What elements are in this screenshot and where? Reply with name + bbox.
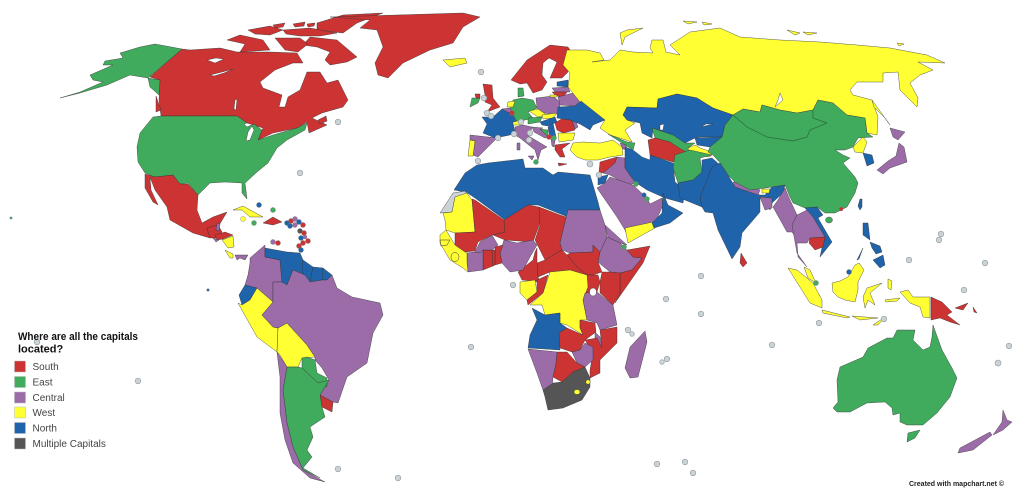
Central Europe [528,96,560,138]
North Africa [454,159,600,220]
Levant and Iraq [598,157,635,185]
legend title: located? [18,344,64,356]
Russian islands [620,21,904,125]
Baltics and Belarus [550,80,581,106]
Nordics [511,45,570,93]
legend title: Where are all the capitals [18,331,138,343]
Aral Sea and Balkhash [660,124,713,130]
Lake Victoria [590,288,596,296]
Mongolia border [733,110,827,141]
legend item: North: North [32,424,57,434]
credit: Created with mapchart.net © [909,480,1005,488]
Iceland [443,58,467,67]
caribbean capital markers [240,202,310,252]
Brazil [262,270,383,403]
Caucasus [608,134,635,150]
Turkmenistan [648,138,687,162]
Colombia [245,245,282,302]
russia [563,21,945,142]
Koreas [853,137,874,166]
island territory markers [34,69,1012,481]
legend item: West: West [32,408,55,419]
Lake Michigan [246,126,254,141]
Argentina [283,367,329,478]
Chile [277,352,325,482]
Benelux Switzerland [502,101,523,125]
Mauritania [443,193,475,233]
Niger [493,205,540,242]
Kenya [600,272,620,305]
India [700,163,785,259]
legend title [18,331,138,356]
Australia [833,325,957,425]
South Africa [543,367,590,410]
Botswana [553,352,585,382]
Taiwan [858,199,862,210]
South Sudan [567,245,602,275]
Turkey [570,140,623,160]
Tajikistan [688,145,712,157]
Alaska and USA [60,44,307,199]
Indonesia and Malaysia [788,263,930,325]
Southeast Asia [773,188,832,283]
Uganda [585,275,600,293]
New Zealand [958,410,1012,453]
Central America [207,206,282,260]
south america [238,245,383,482]
africa [440,159,650,410]
France [482,109,519,138]
legend item: Multiple Capitals: Multiple Capitals [32,439,106,450]
Mali [455,199,505,252]
Uzbekistan [652,128,695,153]
oceania [833,325,1012,453]
Sudan [560,210,607,253]
Russia mainland [563,28,945,142]
Ethiopia [598,237,642,273]
Uruguay [320,395,333,412]
Tasmania [907,430,920,442]
Mexico [145,174,227,238]
Chad [535,207,566,260]
Sri Lanka [740,253,747,267]
Malawi [595,332,602,347]
Italy [515,125,547,160]
Arabian Peninsula [597,177,683,243]
Afghanistan [673,150,712,183]
Philippines [857,223,885,268]
small-state capital markers [10,110,852,291]
Somalia [615,246,650,303]
Greenland [330,13,480,78]
Lake Baikal [775,93,783,107]
Eritrea [605,225,627,245]
Zambia [559,320,596,352]
Kyrgyzstan [695,137,722,147]
legend item: East: East [32,378,53,388]
Angola [528,308,567,350]
legend item: South: South [32,362,59,373]
legend item: Central: Central [32,393,65,404]
Canada [150,13,383,140]
Iberia [468,135,497,157]
Kazakhstan [623,94,733,143]
DR Congo [530,270,588,335]
Nepal Bhutan Bangladesh [733,182,772,210]
Japan [877,128,907,174]
West African coast [440,230,503,272]
Tanzania [583,292,617,330]
Central African Republic [537,250,587,277]
Lesotho and Eswatini [574,380,590,394]
Germany and Denmark [510,88,537,122]
Paraguay [302,357,327,387]
UK and Ireland [470,84,500,112]
Mozambique [585,327,617,378]
China and Mongolia [708,100,873,213]
europe [468,45,605,166]
Cameroon [518,248,540,282]
Peru and Bolivia [238,288,315,367]
Nigeria [500,240,537,272]
north america [60,13,480,260]
Western Sahara [440,191,467,213]
Iran [625,147,685,203]
Namibia [528,349,557,390]
Ukraine [557,101,605,130]
Zimbabwe [572,343,593,367]
Congo region [520,275,548,305]
legend [14,331,138,450]
Venezuela and Guianas [239,248,332,305]
Canadian lakes [207,58,237,110]
Balkans [548,118,578,166]
Papua New Guinea [931,297,977,325]
asia [570,94,977,325]
Madagascar [625,331,647,378]
Pakistan [678,158,720,207]
Hainan [826,217,832,223]
